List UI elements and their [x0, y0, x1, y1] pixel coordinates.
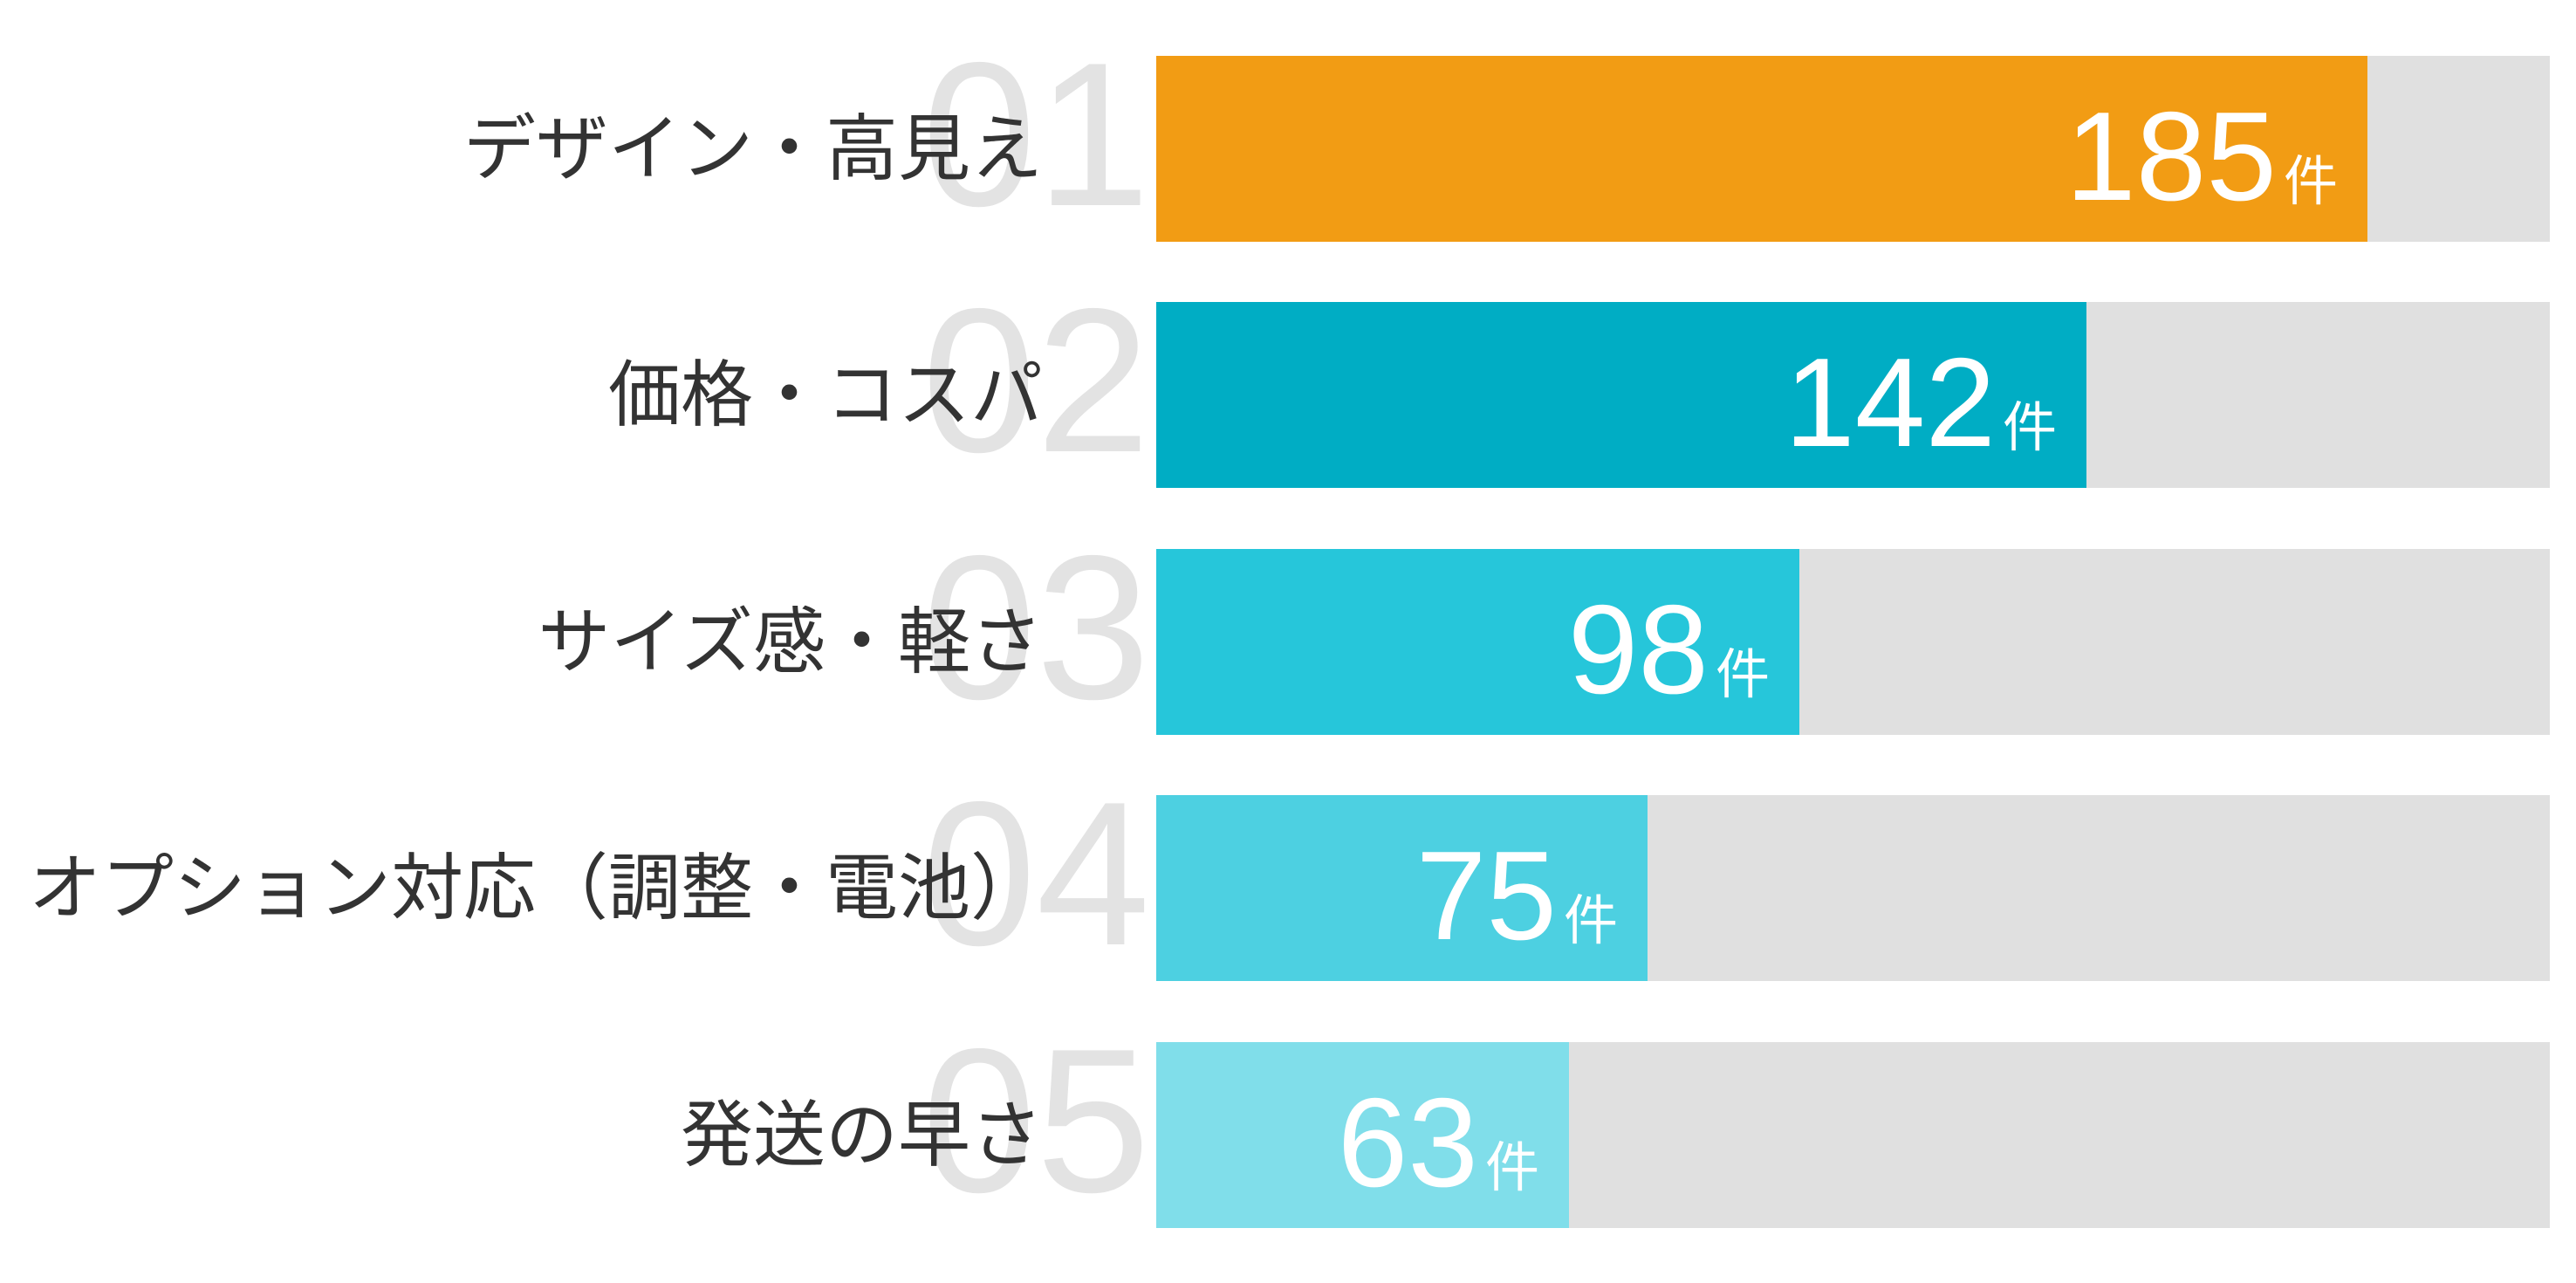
value 63: 63件 — [1338, 1072, 1539, 1213]
label: shipping: 発送の早さ — [681, 1094, 1043, 1176]
value 75: 75件 — [1416, 825, 1618, 966]
row 2 — [608, 265, 2550, 495]
row 5 — [681, 1005, 2550, 1235]
bar track — [1156, 302, 2550, 488]
bar track — [1156, 795, 2550, 981]
label: size: サイズ感・軽さ — [538, 601, 1043, 683]
rank number 03: 03 — [922, 512, 1150, 742]
rank number 01: 01 — [922, 19, 1150, 249]
bar 63 — [1156, 1042, 1569, 1228]
label: design: デザイン・高見え — [463, 108, 1043, 189]
bar 142 — [1156, 302, 2086, 488]
value 142: 142件 — [1785, 332, 2057, 473]
rank number 04: 04 — [922, 758, 1150, 988]
bar track — [1156, 549, 2550, 735]
row 1 — [463, 19, 2550, 249]
rank number 05: 05 — [922, 1005, 1150, 1235]
value 98: 98件 — [1568, 579, 1770, 720]
bar track — [1156, 56, 2550, 242]
bar 98 — [1156, 549, 1799, 735]
label: price: 価格・コスパ — [608, 354, 1043, 436]
bar track — [1156, 1042, 2550, 1228]
value 185: 185件 — [2066, 86, 2338, 227]
row 3 — [538, 512, 2550, 742]
row 4 — [29, 758, 2550, 988]
label: options: オプション対応（調整・電池） — [29, 847, 1043, 929]
bar 75 — [1156, 795, 1648, 981]
bar 185 — [1156, 56, 2367, 242]
rank number 02: 02 — [922, 265, 1150, 495]
